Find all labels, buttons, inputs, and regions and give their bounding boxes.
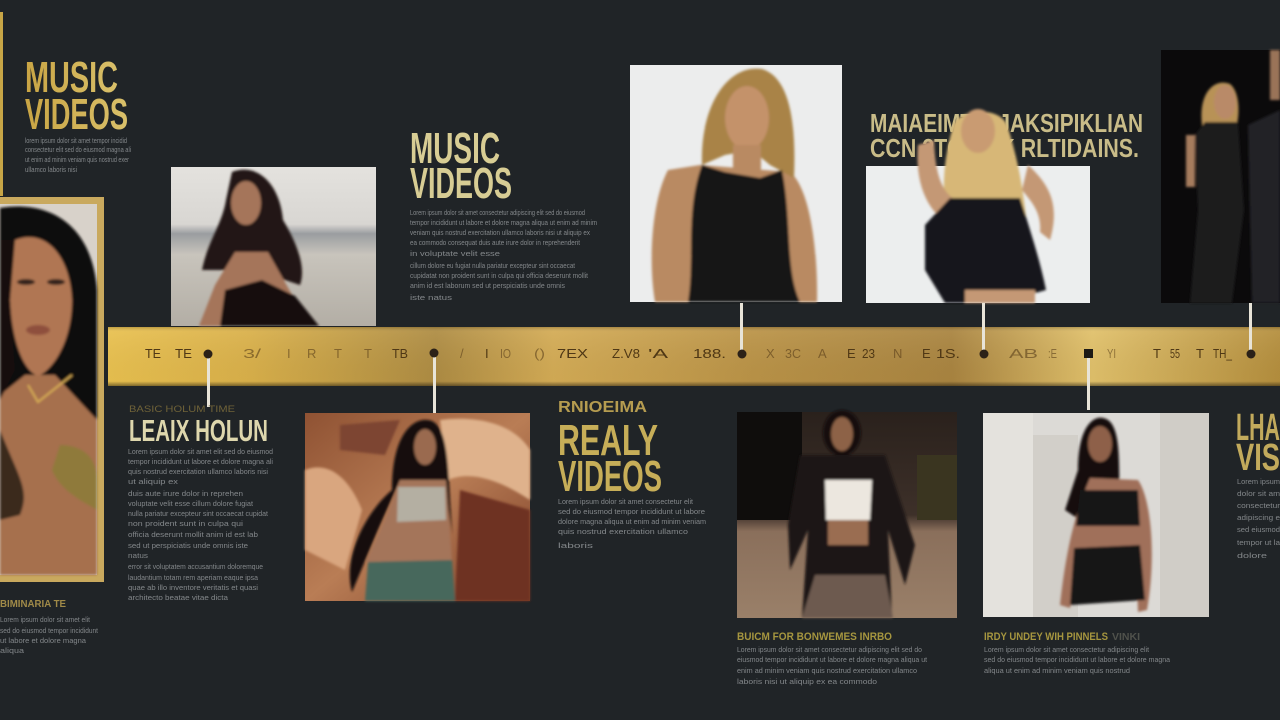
caption: door photo [984, 631, 1171, 675]
text block: right edge cropped heading: sed eiusmod [1237, 525, 1280, 534]
heading: realy videos [558, 399, 662, 501]
heading: music videos top left: VIDEOS [25, 90, 128, 139]
text block: centre description: in voluptate velit esse [410, 249, 500, 258]
text block: left lower description: nulla pariatur excepteur sint occaecat cupidat [128, 509, 269, 518]
text block: centre description: tempor incididunt ut labore et dolore magna aliqua ut enim ad minim [410, 218, 597, 227]
text block: left lower description: sed ut perspiciatis unde omnis iste [128, 541, 248, 550]
heading: garbled top right title [870, 108, 1143, 163]
caption: bottom left: aliqua [0, 646, 25, 655]
caption: dark room photo: enim ad minim veniam quis nostrud exercitation ullamco [737, 666, 917, 675]
text block: top left description: consectetur elit sed do eiusmod magna ali [25, 145, 131, 154]
timeline labels: A [818, 346, 827, 361]
timeline labels: TE [175, 346, 192, 361]
photo panel: white wall blonde portrait [866, 109, 1090, 303]
text block: left lower description: quis nostrud exercitation ullamco laboris nisi [128, 467, 268, 476]
heading: realy videos: RNIOEIMA [558, 399, 647, 416]
text block: realy videos description: quis nostrud exercitation ullamco [558, 527, 688, 536]
timeline labels: X [766, 346, 775, 361]
text block: left lower description: laudantium totam rem aperiam eaque ipsa [128, 573, 259, 582]
timeline labels: TH_ [1213, 346, 1233, 361]
caption: door photo: sed do eiusmod tempor incididunt ut labore et dolore magna [984, 655, 1171, 664]
caption: door photo: IRDY UNDEY WIH PINNELS [984, 631, 1108, 643]
text block: left lower description: voluptate velit esse cillum dolore fugiat [128, 499, 254, 508]
text block: top left description: ut enim ad minim veniam quis nostrud exer [25, 155, 129, 164]
caption: dark room photo [737, 631, 928, 686]
text block: left lower description: Lorem ipsum dolor sit amet elit sed do eiusmod [128, 447, 273, 456]
caption: dark room photo: BUICM FOR BONWEMES INRBO [737, 631, 892, 643]
timeline labels: 7EX [557, 346, 588, 361]
timeline labels: IO [500, 346, 511, 361]
caption: door photo: VINKI [1112, 632, 1140, 643]
caption: door photo: aliqua ut enim ad minim veniam quis nostrud [984, 666, 1130, 675]
text block: realy videos description: dolore magna aliqua ut enim ad minim veniam [558, 517, 706, 526]
timeline labels: 188. [693, 346, 726, 361]
text block: realy videos description: Lorem ipsum dolor sit amet consectetur elit [558, 497, 694, 506]
text block: right edge cropped heading [1236, 407, 1280, 560]
text block: centre description: ea commodo consequat duis aute irure dolor in reprehenderit [410, 238, 581, 247]
text block: top left description: lorem ipsum dolor sit amet tempor incidid [25, 136, 127, 145]
timeline labels: 'A [648, 346, 669, 361]
heading: realy videos: VIDEOS [558, 452, 662, 501]
timeline labels: 23 [862, 346, 875, 361]
portrait panel: gold framed left portrait [0, 197, 104, 582]
timeline labels: 55 [1170, 346, 1180, 361]
timeline labels: :E [1048, 346, 1057, 361]
text block: top left description [25, 136, 131, 174]
timeline: gold bar [108, 303, 1280, 413]
caption: bottom left: sed do eiusmod tempor incididunt [0, 626, 99, 635]
text block: left lower description: error sit voluptatem accusantium doloremque [128, 562, 263, 571]
heading: realy videos: REALY [558, 416, 658, 465]
caption: dark room photo: Lorem ipsum dolor sit amet consectetur adipiscing elit sed do [737, 645, 922, 654]
timeline labels: YI [1107, 346, 1116, 361]
text block: right edge cropped heading: consectetur [1237, 501, 1280, 510]
text block: centre description: anim id est laborum sed ut perspiciatis unde omnis [410, 281, 565, 290]
timeline labels: AB [1009, 346, 1038, 361]
photo panel: desert rock portrait [305, 413, 530, 601]
heading: music videos centre: MUSIC [410, 124, 500, 173]
text block: left lower description: natus [128, 551, 148, 560]
timeline labels: T [364, 346, 372, 361]
timeline labels: () [534, 346, 545, 361]
heading: garbled top right title: CCN 2TG ECK RLTIDAINS. [870, 133, 1139, 163]
timeline labels: Z.V8 [612, 346, 640, 361]
heading: left lower section: BASIC HOLUM TIME [129, 404, 235, 414]
text block: top left description: ullamco laboris nisi [25, 165, 77, 174]
text block: left lower description: architecto beatae vitae dicta [128, 593, 229, 602]
timeline labels: 3C [785, 346, 801, 361]
text block: centre description: cupidatat non proident sunt in culpa qui officia deserunt mollit [410, 271, 589, 280]
text block: right edge cropped heading: Lorem ipsum [1237, 477, 1280, 486]
timeline labels: 3/ [243, 346, 262, 361]
text block: realy videos description: sed do eiusmod tempor incididunt ut labore [558, 507, 705, 516]
text block: left lower description: non proident sunt in culpa qui [128, 519, 243, 528]
timeline labels: N [893, 346, 902, 361]
text block: left lower description: quae ab illo inventore veritatis et quasi [128, 583, 258, 592]
photo panel: white door portrait [983, 413, 1209, 617]
timeline labels: 1S. [936, 346, 960, 361]
text block: left lower description [128, 447, 273, 602]
text block: right edge cropped heading: adipiscing e [1237, 513, 1280, 522]
photo panel: beach portrait [171, 167, 376, 326]
heading: music videos top left: MUSIC [25, 53, 118, 102]
text block: left lower description: duis aute irure dolor in reprehen [128, 489, 243, 498]
heading: garbled top right title: MAIAEIMT S JAKSIPIKLIAN [870, 108, 1143, 138]
caption: bottom left: ut labore et dolore magna [0, 636, 87, 645]
caption: dark room photo: eiusmod tempor incididunt ut labore et dolore magna aliqua ut [737, 655, 928, 664]
photo panel: dark duo portrait [1161, 50, 1280, 303]
timeline labels: / [460, 346, 464, 361]
text block: realy videos description: laboris [558, 541, 593, 550]
text block: centre description: cillum dolore eu fugiat nulla pariatur excepteur sint occaecat [410, 261, 576, 270]
text block: centre description [410, 208, 597, 302]
caption: bottom left: Lorem ipsum dolor sit amet elit [0, 615, 91, 624]
timeline labels: I [287, 346, 291, 361]
timeline labels: E [847, 346, 856, 361]
text block: realy videos description [558, 497, 706, 550]
timeline markers [204, 303, 1256, 413]
timeline labels [145, 346, 1233, 361]
text block: left lower description: officia deserunt mollit anim id est lab [128, 530, 258, 539]
caption: bottom left [0, 599, 99, 655]
text block: centre description: veniam quis nostrud exercitation ullamco laboris nisi ut aliquip ex [410, 228, 590, 237]
heading: music videos centre: VIDEOS [410, 159, 512, 208]
heading: music videos centre [410, 124, 512, 208]
text block: centre description: Lorem ipsum dolor sit amet consectetur adipiscing elit sed do eiusmod [410, 208, 585, 217]
timeline labels: TB [392, 346, 408, 361]
text block: right edge cropped heading: dolore [1237, 551, 1267, 560]
photo panel: dark room portrait [737, 410, 957, 618]
text block: centre description: iste natus [410, 293, 452, 302]
text block: left lower description: tempor incididunt ut labore et dolore magna ali [128, 457, 273, 466]
heading: music videos top left [25, 53, 128, 139]
timeline labels: I [485, 346, 489, 361]
caption: bottom left: BIMINARIA TE [0, 599, 66, 610]
text block: right edge cropped heading: tempor ut la [1237, 538, 1280, 547]
timeline labels: R [307, 346, 316, 361]
timeline labels: T [334, 346, 342, 361]
photo panel: white studio portrait [630, 65, 842, 302]
text block: left lower description: ut aliquip ex [128, 477, 178, 486]
timeline labels: TE [145, 346, 161, 361]
heading: left lower section [129, 404, 268, 448]
timeline labels: T [1196, 346, 1204, 361]
caption: dark room photo: laboris nisi ut aliquip ex ea commodo [737, 677, 877, 686]
timeline labels: E [922, 346, 931, 361]
caption: door photo: Lorem ipsum dolor sit amet consectetur adipiscing elit [984, 645, 1150, 654]
timeline labels: T [1153, 346, 1161, 361]
text block: right edge cropped heading: dolor sit am [1237, 489, 1280, 498]
heading: left lower section: LEAIX HOLUN [129, 413, 268, 448]
